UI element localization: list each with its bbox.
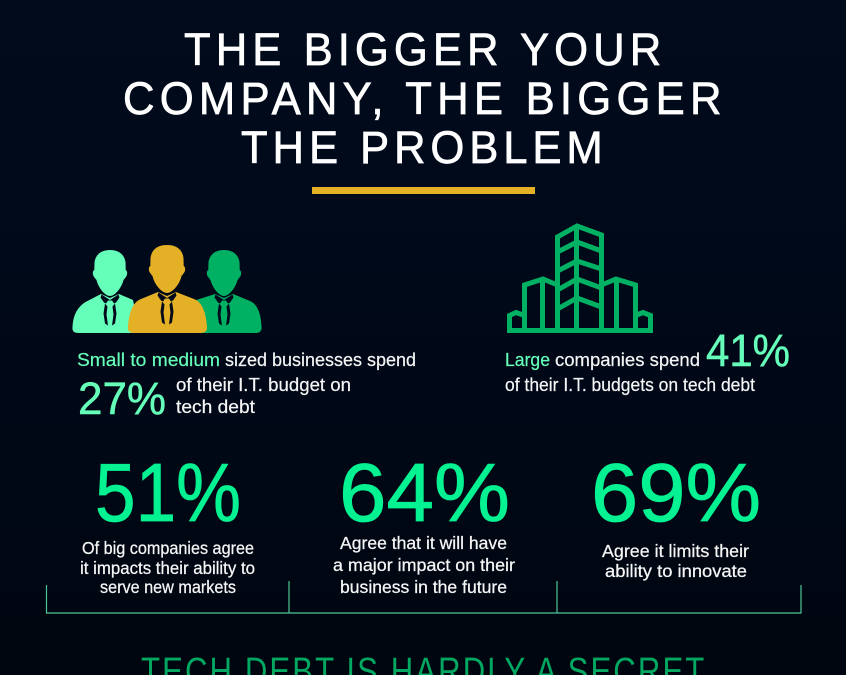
stat column: 69% bbox=[591, 446, 761, 581]
bracket line under stats bbox=[46, 581, 801, 613]
stat column: 51%: Of big companies agree bbox=[82, 538, 254, 558]
title underline bbox=[312, 187, 535, 194]
stat column: 51% bbox=[80, 446, 255, 597]
text: small to medium businesses: Small to medium bbox=[77, 349, 220, 370]
stat: 41%: 41% bbox=[706, 325, 790, 376]
stat column: 51%: serve new markets bbox=[100, 577, 236, 597]
text: large companies: Large bbox=[505, 349, 550, 370]
stat column: 51%: 51% bbox=[95, 446, 241, 539]
text: large companies: of their I.T. budgets on tech debt bbox=[505, 374, 755, 395]
text: large companies: companies spend bbox=[555, 349, 700, 370]
stat column: 64%: a major impact on their bbox=[333, 555, 515, 575]
stat column: 64% bbox=[333, 446, 515, 597]
title: THE BIGGER YOUR bbox=[184, 25, 661, 75]
title: COMPANY, THE BIGGER bbox=[123, 74, 721, 124]
text: small to medium businesses: of their I.T. budget on bbox=[176, 374, 351, 395]
stat column: 64%: Agree that it will have bbox=[340, 533, 507, 553]
text: small to medium businesses: sized businesses spend bbox=[225, 349, 416, 370]
title: THE PROBLEM bbox=[241, 123, 603, 173]
text: large companies bbox=[505, 325, 790, 395]
icon: centre person bbox=[128, 245, 207, 333]
icon: three business people bbox=[72, 245, 262, 333]
title bbox=[123, 25, 721, 173]
icon: left person bbox=[72, 250, 140, 333]
icon: office buildings bbox=[507, 226, 653, 330]
text: small to medium businesses bbox=[77, 349, 416, 424]
stat column: 64%: business in the future bbox=[340, 577, 507, 597]
stat: 27%: 27% bbox=[78, 373, 166, 424]
icon: right person bbox=[190, 250, 262, 333]
stat column: 69%: 69% bbox=[591, 446, 761, 539]
stat column: 51%: it impacts their ability to bbox=[80, 558, 255, 578]
text: small to medium businesses: tech debt bbox=[176, 396, 255, 417]
stat column: 69%: ability to innovate bbox=[605, 561, 747, 581]
stat column: 64%: 64% bbox=[339, 446, 510, 539]
stat column: 69%: Agree it limits their bbox=[602, 541, 749, 561]
